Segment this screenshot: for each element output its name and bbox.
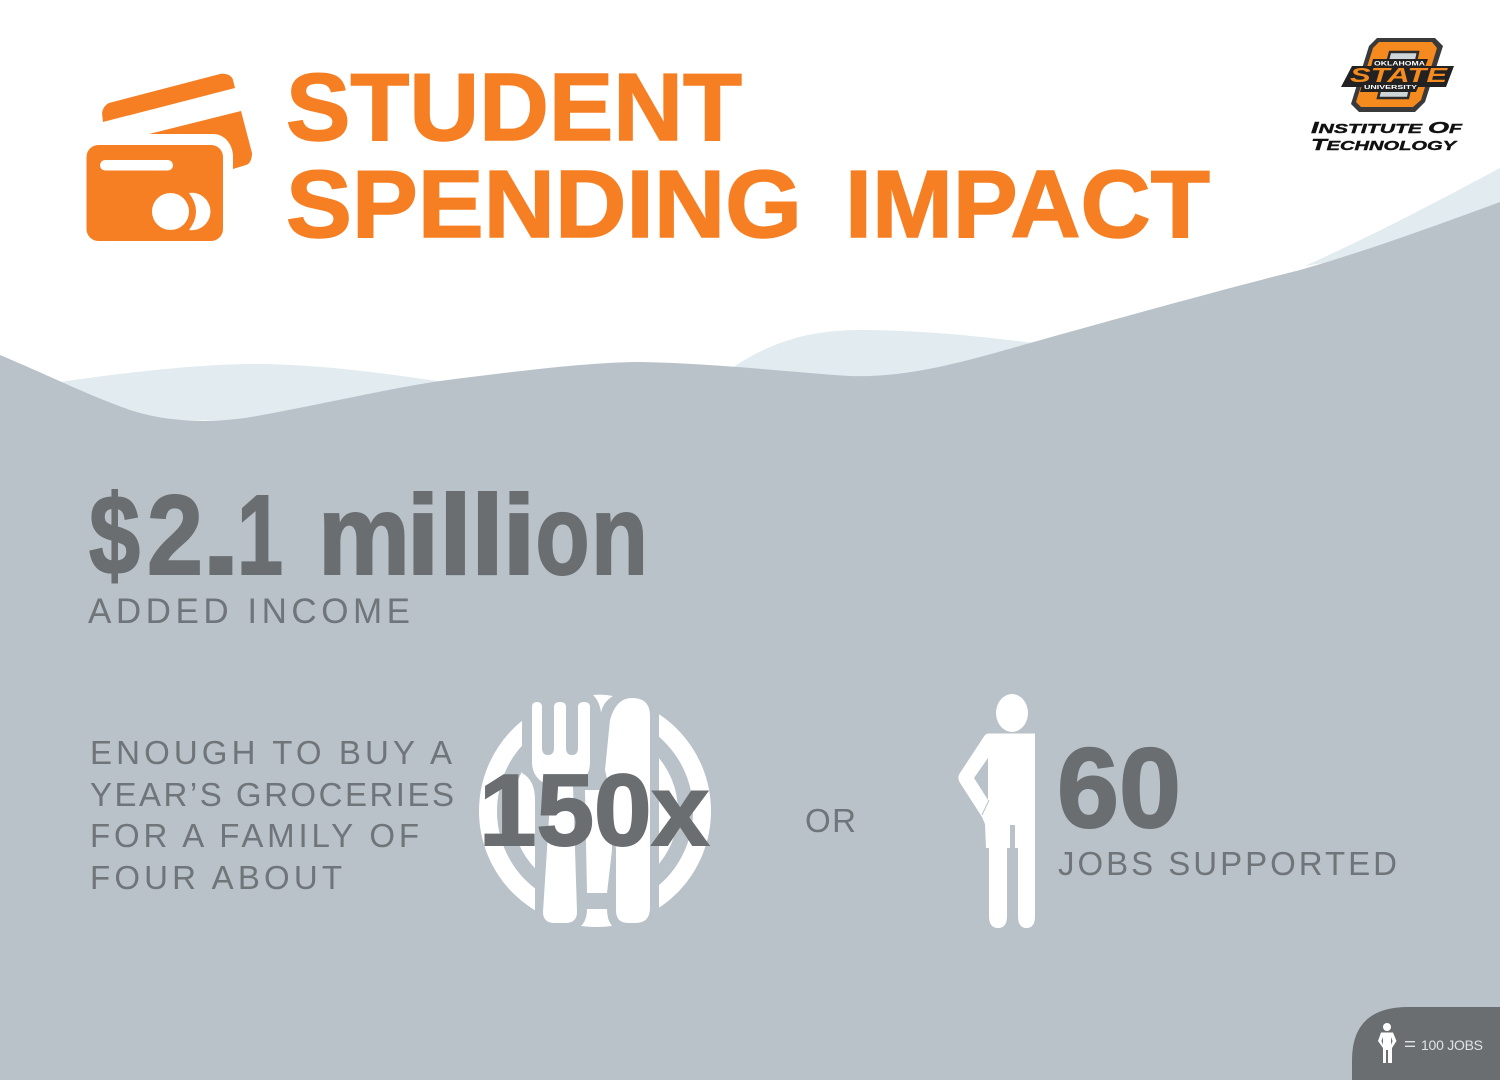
headline figure: $ — [89, 472, 140, 598]
logo text: T ECHNOLOGY — [1311, 137, 1459, 154]
headline figure: n — [591, 472, 648, 598]
150x figure: 150x — [479, 755, 709, 867]
groceries text — [90, 734, 454, 896]
plate pieces between cutlery — [581, 695, 613, 927]
headline figure: o — [536, 472, 590, 598]
logo text — [1311, 120, 1463, 154]
groceries text: YEAR’S GROCERIES — [90, 776, 454, 813]
legend text: 100 JOBS — [1421, 1037, 1483, 1053]
logo mark: OKLAHOMA — [1374, 62, 1426, 68]
headline figure — [89, 472, 648, 598]
knife — [605, 698, 650, 923]
groceries text: ENOUGH TO BUY A — [90, 734, 452, 771]
headline figure: l — [470, 472, 504, 598]
legend text — [1404, 1034, 1483, 1054]
icon: standing person — [958, 694, 1035, 928]
icon: credit cards — [86, 74, 252, 241]
jobs supported label: JOBS SUPPORTED — [1058, 845, 1397, 882]
legend text: = — [1404, 1034, 1416, 1054]
logo mark — [1341, 38, 1454, 112]
title: STUDENT — [286, 54, 742, 161]
groceries text: FOR A FAMILY OF — [90, 817, 419, 854]
headline figure: . — [201, 472, 241, 598]
title: IMPACT — [845, 151, 1210, 258]
60 figure — [1057, 725, 1181, 851]
logo text: INSTITUTE O F — [1311, 120, 1463, 137]
icon: plate with cutlery — [479, 690, 711, 935]
60 figure: 6 — [1057, 725, 1119, 851]
legend — [1352, 1007, 1500, 1080]
headline figure: 1 — [237, 472, 283, 598]
title — [286, 54, 1210, 258]
logo mark: STATE — [1350, 65, 1448, 87]
headline figure: m — [318, 472, 410, 598]
or label: OR — [805, 802, 856, 839]
headline figure: i — [502, 472, 536, 598]
fork — [532, 702, 590, 923]
logo: Oklahoma State University Institute of Technology — [1311, 38, 1463, 154]
headline figure: l — [438, 472, 472, 598]
added income label: ADDED INCOME — [88, 592, 410, 631]
headline figure: i — [406, 472, 440, 598]
headline figure: 2 — [147, 472, 203, 598]
60 figure: 0 — [1119, 725, 1181, 851]
light background hills — [60, 168, 1500, 420]
legend icon: person — [1378, 1023, 1396, 1063]
plate rings — [479, 690, 711, 935]
groceries text: FOUR ABOUT — [90, 859, 342, 896]
title: SPENDING — [286, 151, 802, 258]
logo mark: UNIVERSITY — [1364, 85, 1418, 91]
